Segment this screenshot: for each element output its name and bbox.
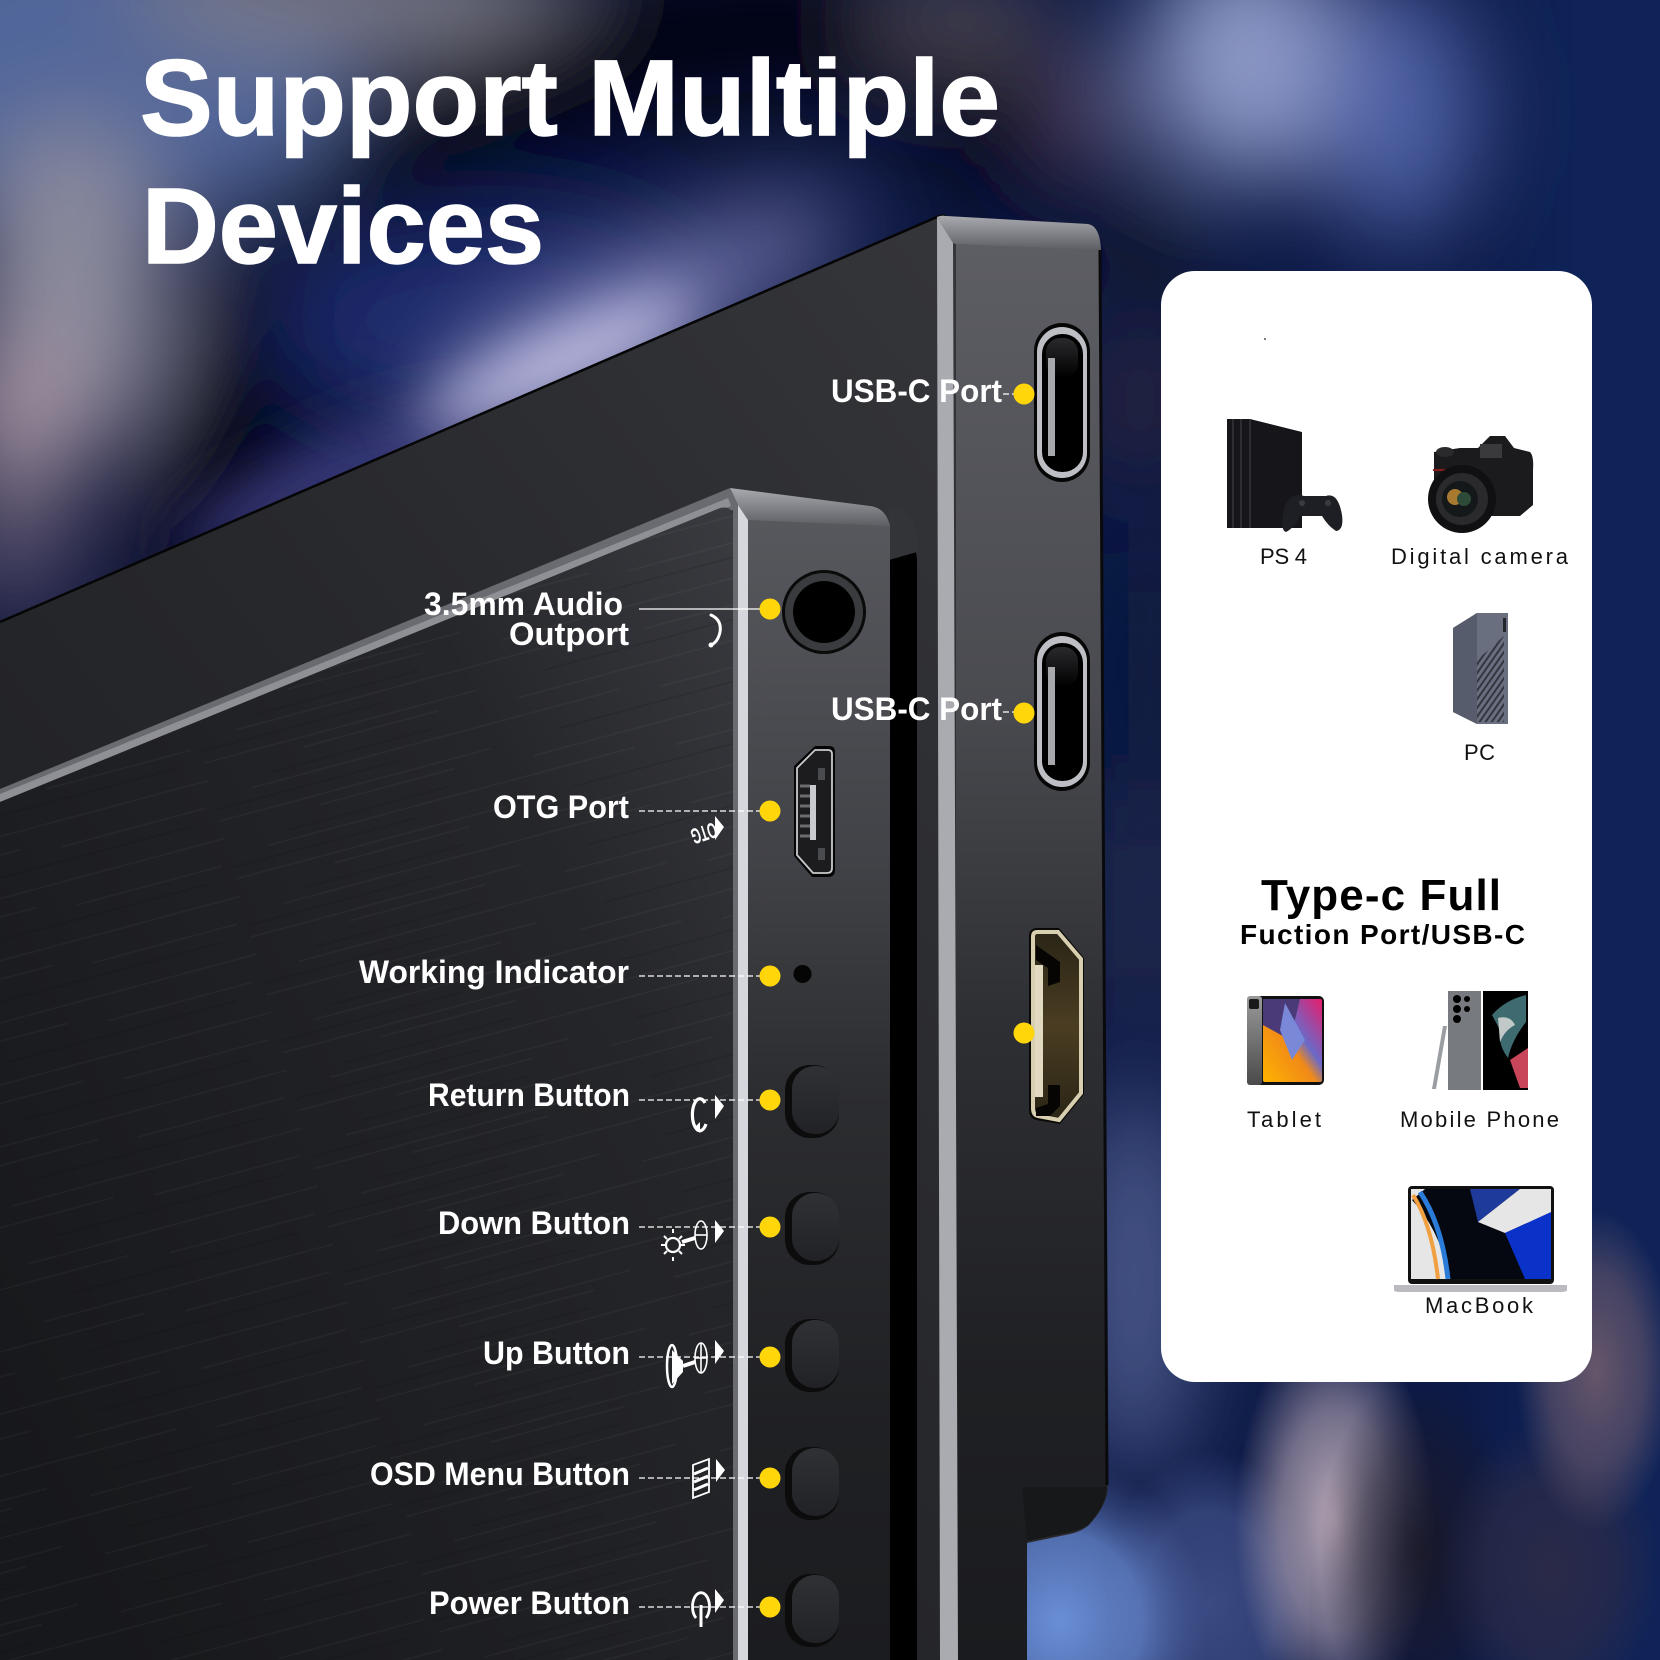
front monitor bezel [0,488,738,802]
port: HDMI [1029,928,1084,1124]
leader lines [639,394,1016,1607]
label: PS 4: PS 4 [1260,544,1308,569]
icon: volume plus [667,1340,724,1387]
port: USB-C upper [1034,323,1090,482]
icon: power [692,1589,724,1627]
front monitor [0,488,917,1660]
label: digital camera: Digital camera [1391,544,1569,569]
port: USB-C lower [1034,632,1090,791]
device: phone [1432,991,1528,1090]
device: PC tower [1453,613,1508,724]
label: MacBook: MacBook [1425,1293,1534,1318]
port labels: Working Indicator [359,954,629,990]
yellow callout dots [760,384,1034,1618]
back monitor silver edge [937,217,958,1660]
port labels: USB-C Port [831,373,1002,409]
icon: menu [693,1459,725,1498]
icon: headphone [708,615,720,648]
button: return [785,1065,839,1138]
panel: compatible devices [1161,271,1592,1382]
label: tablet: Tablet [1247,1107,1322,1132]
port: micro USB OTG [794,746,835,877]
device: PS4 [1227,419,1342,532]
port labels [359,373,1002,1621]
title: Support Multiple [140,37,1000,158]
device: camera [1428,436,1533,533]
back monitor body [0,216,1108,1660]
device: tablet [1247,996,1324,1085]
port labels: Outport [509,616,629,652]
port labels: Up Button [483,1335,630,1371]
button: power [785,1574,839,1647]
button: OSD menu [785,1447,839,1520]
back monitor [0,216,1108,1660]
button: up [785,1319,839,1392]
device: MacBook [1394,1186,1567,1292]
front monitor side face [748,518,890,1660]
icon: brightness minus [661,1220,724,1261]
shadow gap [889,522,917,1660]
icon: OTG marker [688,816,724,849]
heading: Type-c Full: Fuction Port/USB-C [1240,919,1525,950]
port labels: OTG Port [493,789,629,825]
front monitor silver edge [733,505,738,1660]
back monitor top bevel [937,216,1101,250]
label: mobile phone: Mobile Phone [1400,1107,1560,1132]
port labels: 3.5mm Audio [424,586,623,622]
port labels: Down Button [438,1205,630,1241]
port labels: OSD Menu Button [370,1456,630,1492]
back monitor side face [956,240,1107,1660]
heading: Type-c Full: Type-c Full [1261,871,1501,920]
port labels: Power Button [429,1585,630,1621]
heading: Type-c Full [1240,871,1525,950]
button: down [785,1192,839,1265]
port labels: USB-C Port [831,691,1002,727]
label: PC: PC [1464,740,1496,765]
front monitor brushed panel [0,507,733,1660]
port: audio jack [782,570,866,654]
icon: return [692,1095,724,1133]
icon: OTG marker: OTG [688,817,720,849]
port labels: Return Button [428,1077,630,1113]
title: Devices [142,165,544,286]
front monitor top bevel [730,488,890,526]
title [140,37,1000,286]
working indicator LED [794,965,812,983]
